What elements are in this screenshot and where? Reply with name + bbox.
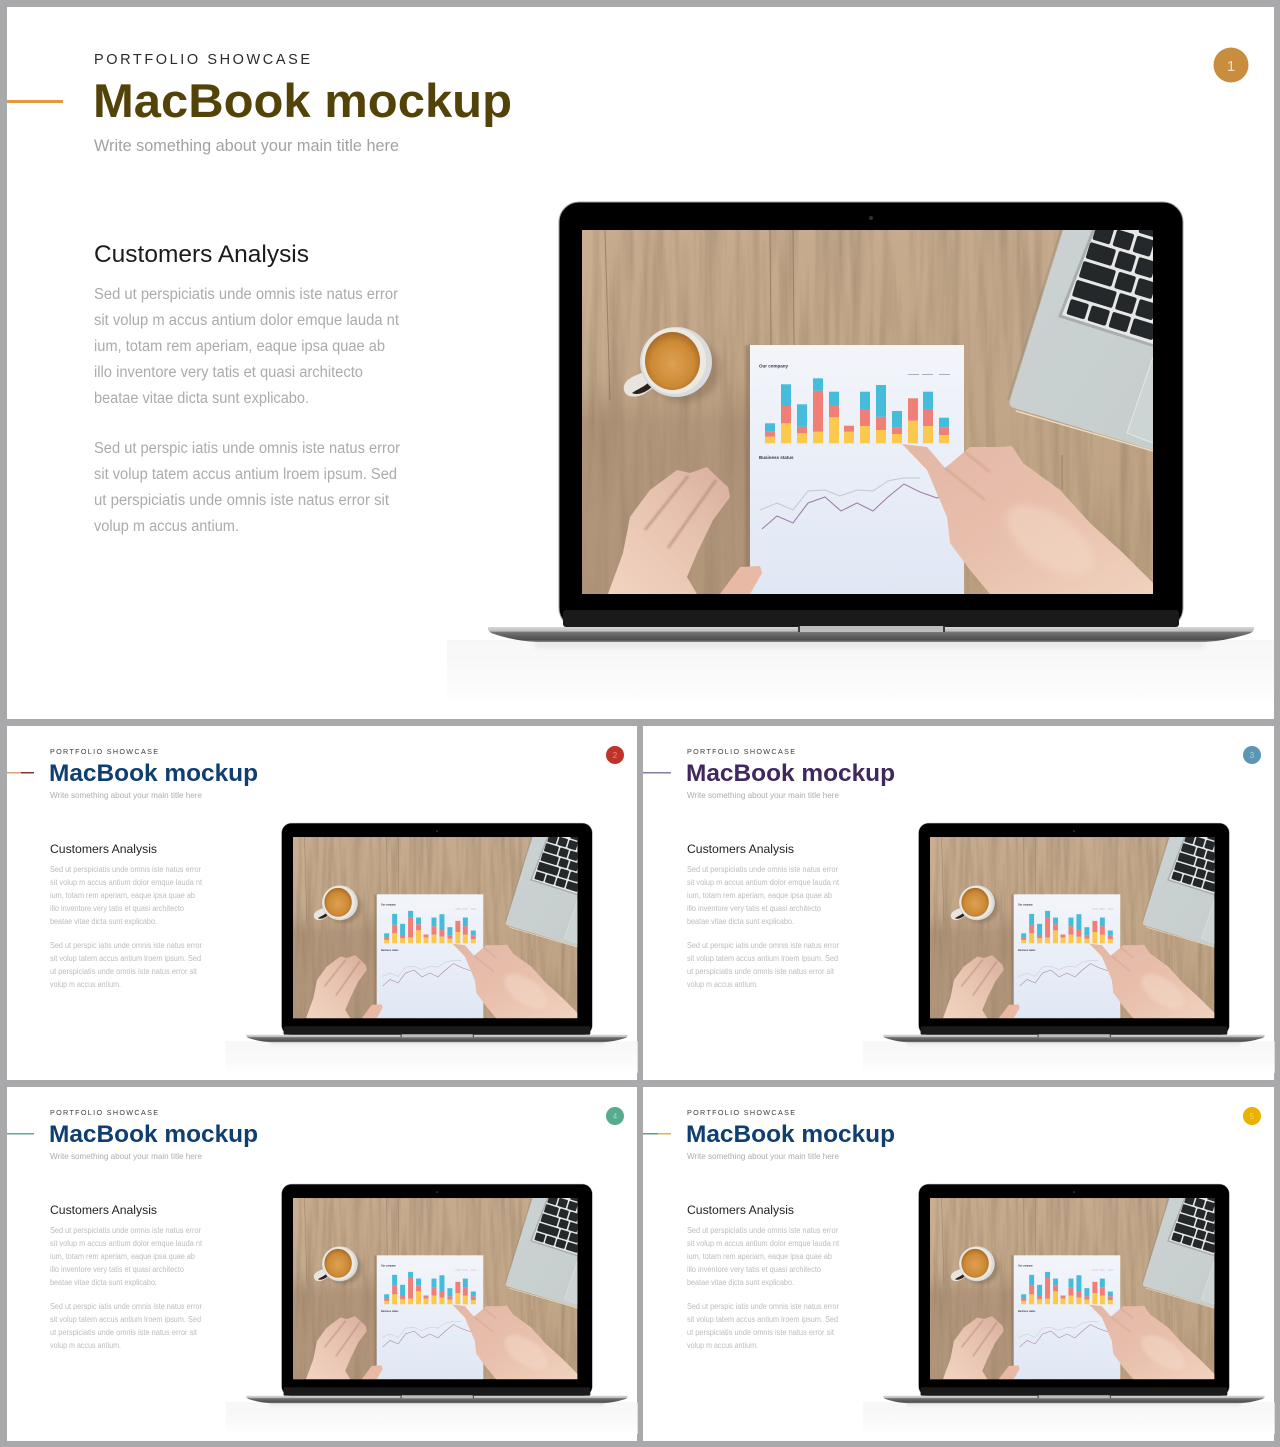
body text: beatae vitae dicta sunt explicabo.: [687, 917, 794, 926]
accent line: [643, 772, 671, 774]
laptop shadow: [447, 640, 1274, 704]
body text: sit volup tatem accus antium lroem ipsum. Sed: [50, 954, 201, 963]
body text: Sed ut perspiciatis unde omnis iste natus error: [687, 865, 838, 874]
body text: ut perspiciatis unde omnis iste natus error sit: [50, 967, 198, 976]
body text: illo inventore very tatis et quasi architecto: [50, 904, 185, 913]
eyebrow: PORTFOLIO SHOWCASE: [94, 52, 310, 68]
body text: sit volup m accus antium dolor emque lauda nt: [687, 1239, 840, 1248]
body text: illo inventore very tatis et quasi architecto: [687, 1265, 822, 1274]
body text: Sed ut perspic iatis unde omnis iste natus error: [687, 941, 839, 950]
body text: volup m accus antium.: [50, 1341, 121, 1350]
body paragraph 2: sit volup tatem accus antium lroem ipsum. Sed: [94, 466, 397, 483]
section heading: Customers Analysis: [94, 241, 309, 268]
coffee cup: [624, 327, 720, 402]
body text: volup m accus antium.: [50, 980, 121, 989]
eyebrow: PORTFOLIO SHOWCASE: [687, 1108, 795, 1117]
body paragraph 1: sit volup m accus antium dolor emque lauda nt: [94, 312, 400, 329]
keyboard keys: [1066, 184, 1233, 353]
body text: sit volup tatem accus antium lroem ipsum. Sed: [687, 1315, 838, 1324]
body paragraph 1: Sed ut perspiciatis unde omnis iste natus error: [94, 286, 398, 303]
laptop base: [488, 626, 1254, 642]
left hand: [608, 467, 762, 594]
badge number 2: [606, 746, 624, 764]
right hand: [902, 444, 1153, 594]
subtitle: Write something about your main title here: [687, 790, 839, 800]
body text: beatae vitae dicta sunt explicabo.: [50, 917, 157, 926]
title: MacBook mockup: [93, 75, 512, 128]
title: MacBook mockup: [686, 1121, 895, 1148]
line chart: [760, 478, 947, 529]
body paragraph 2: volup m accus antium.: [94, 518, 239, 535]
body text: ium, totam rem aperiam, eaque ipsa quae ab: [687, 891, 833, 900]
panel: slide 2: [7, 726, 638, 1080]
title: MacBook mockup: [49, 1121, 258, 1148]
body text: [687, 865, 840, 989]
body text: illo inventore very tatis et quasi architecto: [50, 1265, 185, 1274]
panel: slide 4: [7, 1087, 638, 1441]
badge number 2: 2: [613, 751, 618, 760]
body text: ium, totam rem aperiam, eaque ipsa quae ab: [50, 1252, 196, 1261]
title: MacBook mockup: [49, 760, 258, 787]
badge number 5: 5: [1250, 1112, 1255, 1121]
body text: Sed ut perspic iatis unde omnis iste natus error: [687, 1302, 839, 1311]
chart legend: [908, 374, 950, 375]
title: MacBook mockup: [686, 760, 895, 787]
subtitle: Write something about your main title here: [687, 1151, 839, 1161]
section heading: Customers Analysis: [50, 842, 157, 856]
body text: sit volup tatem accus antium lroem ipsum. Sed: [687, 954, 838, 963]
laptop mockup: [226, 1175, 638, 1434]
subtitle: Write something about your main title here: [50, 790, 202, 800]
subtitle: Write something about your main title here: [50, 1151, 202, 1161]
badge number 1: [1214, 48, 1248, 82]
eyebrow: PORTFOLIO SHOWCASE: [50, 747, 158, 756]
body text: [50, 1226, 203, 1350]
laptop mockup: [863, 1175, 1275, 1434]
body text: Sed ut perspiciatis unde omnis iste natus error: [50, 1226, 201, 1235]
accent line: [7, 100, 63, 103]
body text: Sed ut perspiciatis unde omnis iste natus error: [50, 865, 201, 874]
body text: [50, 865, 203, 989]
paper with charts: Business status: [759, 455, 794, 460]
body text: sit volup tatem accus antium lroem ipsum. Sed: [50, 1315, 201, 1324]
body text: volup m accus antium.: [687, 1341, 758, 1350]
laptop mockup: [447, 184, 1274, 704]
body text: sit volup m accus antium dolor emque lauda nt: [50, 1239, 203, 1248]
laptop bezel: [559, 202, 1183, 628]
body text: ium, totam rem aperiam, eaque ipsa quae ab: [687, 1252, 833, 1261]
section heading: Customers Analysis: [687, 1203, 794, 1217]
paper with charts: Our company: [759, 364, 789, 368]
panel: slide 5: [643, 1087, 1275, 1441]
paper with charts: [750, 345, 964, 594]
body text: sit volup m accus antium dolor emque lauda nt: [50, 878, 203, 887]
badge number 5: [1243, 1107, 1261, 1125]
accent line: [643, 1133, 671, 1134]
subtitle: Write something about your main title here: [94, 137, 399, 155]
body text: volup m accus antium.: [687, 980, 758, 989]
body paragraph 2: [94, 440, 400, 535]
body text: Sed ut perspic iatis unde omnis iste natus error: [50, 941, 202, 950]
laptop mockup: [863, 814, 1275, 1073]
badge number 4: [606, 1107, 624, 1125]
body paragraph 1: [94, 286, 400, 407]
screen photo: [582, 184, 1233, 594]
badge number 3: [1243, 746, 1261, 764]
body text: [687, 1226, 840, 1350]
body text: ut perspiciatis unde omnis iste natus error sit: [687, 1328, 835, 1337]
panel: slide 3: [643, 726, 1275, 1080]
body text: ut perspiciatis unde omnis iste natus error sit: [50, 1328, 198, 1337]
body text: ut perspiciatis unde omnis iste natus error sit: [687, 967, 835, 976]
body paragraph 2: Sed ut perspic iatis unde omnis iste natus error: [94, 440, 400, 457]
badge number 1: 1: [1227, 58, 1235, 75]
body text: Sed ut perspiciatis unde omnis iste natus error: [687, 1226, 838, 1235]
laptop mockup: [226, 814, 638, 1073]
body text: beatae vitae dicta sunt explicabo.: [687, 1278, 794, 1287]
accent line: [7, 1133, 34, 1134]
wood table: [582, 230, 1153, 594]
accent line: [7, 772, 34, 774]
badge number 3: 3: [1250, 751, 1255, 760]
background laptop: [1008, 184, 1233, 451]
body text: Sed ut perspic iatis unde omnis iste natus error: [50, 1302, 202, 1311]
panel: main slide 1: [7, 7, 1274, 719]
body paragraph 1: illo inventore very tatis et quasi architecto: [94, 364, 363, 381]
body paragraph 1: beatae vitae dicta sunt explicabo.: [94, 390, 309, 407]
badge number 4: 4: [613, 1112, 618, 1121]
section heading: Customers Analysis: [687, 842, 794, 856]
body text: ium, totam rem aperiam, eaque ipsa quae ab: [50, 891, 196, 900]
eyebrow: PORTFOLIO SHOWCASE: [687, 747, 795, 756]
body text: beatae vitae dicta sunt explicabo.: [50, 1278, 157, 1287]
body paragraph 1: ium, totam rem aperiam, eaque ipsa quae ab: [94, 338, 385, 355]
bar chart: [765, 378, 949, 443]
section heading: Customers Analysis: [50, 1203, 157, 1217]
body text: illo inventore very tatis et quasi architecto: [687, 904, 822, 913]
eyebrow: PORTFOLIO SHOWCASE: [50, 1108, 158, 1117]
trackpad: [1127, 357, 1153, 443]
body paragraph 2: ut perspiciatis unde omnis iste natus error sit: [94, 492, 390, 509]
body text: sit volup m accus antium dolor emque lauda nt: [687, 878, 840, 887]
